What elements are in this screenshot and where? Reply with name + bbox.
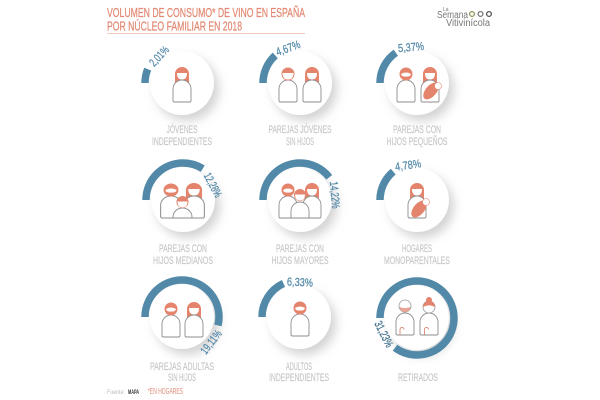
source note: Fuente:: [107, 389, 125, 396]
panel: parejas con hijos pequeños: 5,37%: [398, 41, 425, 55]
panel: jóvenes independientes: INDEPENDIENTES: [152, 136, 212, 148]
logo: La Semana Vitivinícola: [437, 7, 491, 29]
panel: parejas con hijos mayores: HIJOS MAYORES: [272, 255, 328, 267]
title: POR NÚCLEO FAMILIAR EN 2018: [107, 18, 242, 34]
logo: La Semana Vitivinícola: Vitivinícola: [446, 18, 490, 29]
logo: La Semana Vitivinícola: Semana: [437, 10, 468, 21]
panel: hogares monoparentales: 4,78%: [394, 158, 422, 174]
panel: adultos independientes: [262, 276, 336, 384]
panel: jóvenes independientes: [145, 44, 219, 148]
panel: retirados: 31,23%: [371, 319, 395, 350]
panel: retirados: RETIRADOS: [398, 372, 438, 384]
panel: hogares monoparentales: MONOPARENTALES: [384, 255, 450, 267]
panel: retirados: [371, 281, 454, 384]
panel: adultos independientes: ADULTOS: [286, 361, 312, 373]
panel: jóvenes independientes: 2,01%: [148, 44, 172, 69]
panel: parejas jóvenes sin hijos: SIN HIJOS: [286, 136, 314, 148]
panel: parejas con hijos medianos: 12,28%: [201, 171, 224, 200]
panel: parejas con hijos pequeños: PAREJAS CON: [393, 124, 441, 136]
panel: hogares monoparentales: [380, 158, 454, 267]
source note: MAPA: [128, 389, 139, 396]
panel: parejas con hijos pequeños: HIJOS PEQUEÑOS: [386, 135, 448, 148]
panel: parejas con hijos medianos: [146, 163, 224, 267]
source note: [107, 387, 183, 396]
panel: parejas adultas sin hijos: 19,11%: [199, 328, 225, 357]
panel: parejas con hijos mayores: [263, 163, 341, 267]
panel: parejas con hijos mayores: PAREJAS CON: [276, 243, 324, 255]
logo: La Semana Vitivinícola: La: [443, 7, 449, 13]
panel: parejas adultas sin hijos: PAREJAS ADULTAS: [150, 361, 214, 373]
panel: parejas jóvenes sin hijos: 4,67%: [275, 39, 302, 59]
panel: adultos independientes: 6,33%: [287, 276, 313, 290]
panel: parejas jóvenes sin hijos: PAREJAS JÓVENES: [268, 123, 332, 136]
panel: parejas adultas sin hijos: [145, 280, 225, 384]
panel: adultos independientes: INDEPENDIENTES: [269, 372, 329, 384]
panel: jóvenes independientes: JÓVENES: [166, 123, 198, 136]
panel: parejas jóvenes sin hijos: [263, 39, 337, 148]
title: VOLUMEN DE CONSUMO* DE VINO EN ESPAÑA: [107, 5, 305, 20]
title: [107, 5, 305, 34]
panel: parejas adultas sin hijos: SIN HIJOS: [168, 372, 196, 384]
panel: parejas con hijos mayores: 14,22%: [327, 181, 341, 209]
panel: hogares monoparentales: HOGARES: [402, 243, 432, 255]
source note: *EN HOGARES: [148, 387, 183, 396]
panel: parejas con hijos medianos: HIJOS MEDIANOS: [153, 255, 213, 267]
panel: parejas con hijos pequeños: [380, 41, 454, 148]
panel: parejas con hijos medianos: PAREJAS CON: [159, 243, 207, 255]
